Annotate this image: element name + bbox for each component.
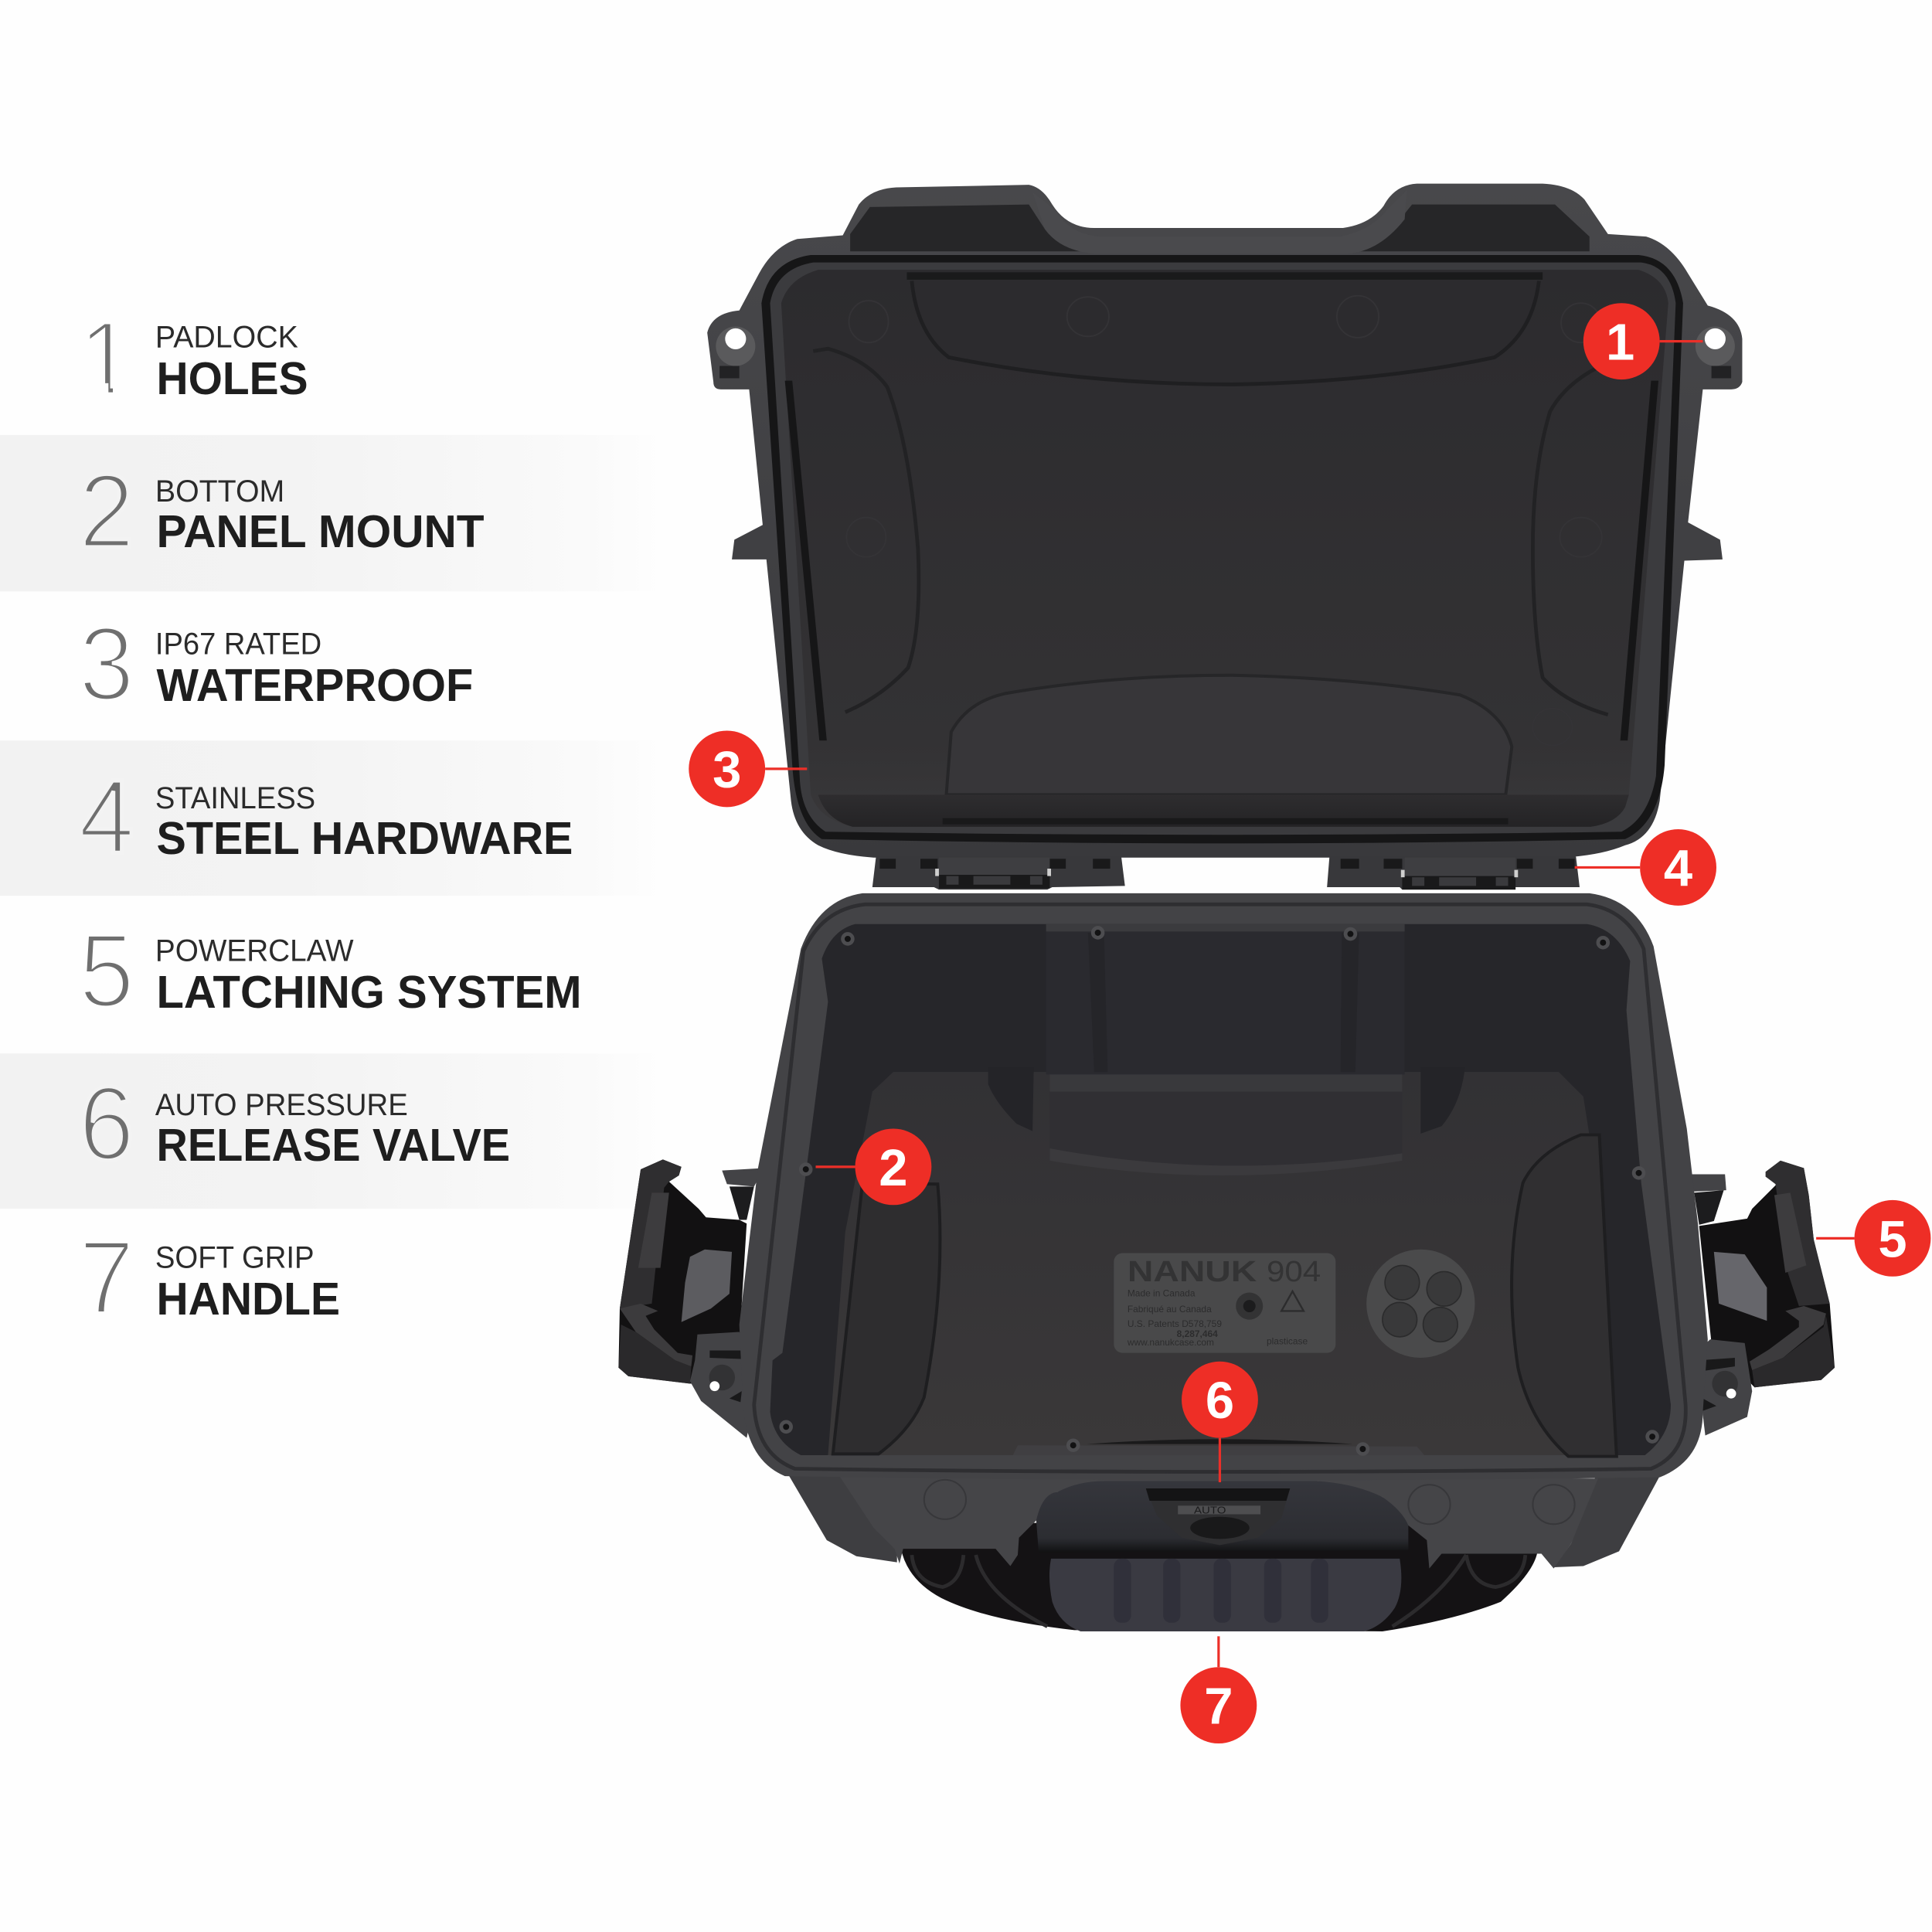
product plate: 904: [1267, 1255, 1321, 1288]
lid handle recess: [850, 205, 1590, 253]
feature 6: 6: [79, 1064, 134, 1182]
back wall ribs: [1088, 933, 1359, 1072]
callout 2: [815, 1128, 931, 1205]
latch bearing: [1714, 1252, 1767, 1321]
feature 4: STAINLESS: [155, 781, 315, 815]
callout 2: 2: [879, 1139, 908, 1197]
feature 3: [79, 605, 473, 723]
feature 1: [74, 299, 308, 417]
rim groove: [754, 904, 1685, 1471]
lid lower band: [818, 794, 1629, 827]
lid left groove: [785, 381, 827, 740]
feature 6: [79, 1064, 510, 1182]
row band 2: [0, 435, 665, 591]
lid right groove: [1621, 381, 1658, 740]
cavity: [770, 924, 1671, 1455]
left hinge: [872, 856, 1125, 889]
product plate: www.nanukcase.com: [1127, 1337, 1214, 1348]
rim: [740, 893, 1708, 1480]
feature 7: [79, 1219, 340, 1336]
latch wedge: [1752, 1316, 1835, 1387]
feature 4: [79, 757, 573, 875]
raised floor panel: [1049, 1092, 1402, 1171]
cavity floor: [828, 1072, 1614, 1455]
feature 7: 7: [79, 1219, 134, 1336]
callout 3: [689, 730, 807, 807]
lid bottom bar: [943, 818, 1509, 825]
product plate: Fabriqué au Canada: [1128, 1304, 1212, 1315]
notch left: [988, 1067, 1034, 1131]
notch right: [1420, 1067, 1465, 1134]
feature 5: [79, 912, 582, 1029]
feature 7: SOFT GRIP: [155, 1241, 315, 1275]
latch wedge: [618, 1325, 691, 1383]
feature 5: LATCHING SYSTEM: [156, 967, 582, 1018]
case base: [740, 893, 1708, 1569]
feature 1: HOLES: [156, 353, 308, 404]
feature 4: 4: [79, 757, 134, 875]
feature 2: PANEL MOUNT: [156, 506, 485, 557]
feature 5: POWERCLAW: [155, 934, 354, 968]
screws: [781, 928, 1657, 1454]
lid inner rim: [770, 263, 1675, 835]
floor right recess: [1512, 1134, 1617, 1457]
callout 1: 1: [1606, 314, 1634, 372]
callout 4: [1575, 829, 1716, 906]
padlock hole right: [1696, 327, 1735, 378]
feature 7: HANDLE: [156, 1274, 340, 1325]
lid: [707, 184, 1742, 858]
feature 3: IP67 RATED: [155, 628, 321, 662]
right latch: [1699, 1161, 1835, 1387]
callout 3: 3: [713, 741, 741, 799]
callout 6: 6: [1206, 1372, 1234, 1430]
product plate: Made in Canada: [1128, 1287, 1196, 1298]
hinges: [872, 856, 1580, 889]
raised floor lip: [1049, 1148, 1402, 1175]
front lip: [1013, 1445, 1424, 1455]
shelf bar: [1049, 1074, 1402, 1092]
handle: [900, 1523, 1538, 1631]
latch silhouette: [618, 1159, 747, 1383]
back wall lip: [1046, 924, 1405, 931]
padlock hole left: [716, 327, 755, 378]
grip ribs: [1114, 1559, 1328, 1623]
feature 2: [79, 452, 485, 570]
row band 6: [0, 1053, 665, 1209]
feature 5: 5: [79, 912, 134, 1029]
feature 1: PADLOCK: [155, 321, 298, 355]
latch slot: [1774, 1192, 1806, 1273]
callout 1: [1583, 303, 1702, 379]
callout 5: [1816, 1200, 1930, 1277]
auto pressure valve: AUTO: [1194, 1505, 1226, 1516]
front body panel: [838, 1474, 1598, 1569]
auto pressure valve: [1146, 1488, 1290, 1545]
lid bottom pocket: [946, 675, 1512, 794]
callout 7: [1180, 1636, 1257, 1743]
product plate: [1114, 1253, 1335, 1353]
callout 4: 4: [1664, 839, 1692, 897]
latch body: [620, 1159, 682, 1308]
row band 4: [0, 740, 665, 896]
feature 3: WATERPROOF: [156, 660, 473, 711]
moulded marks: [924, 1480, 1575, 1524]
lid outer shell: [707, 184, 1742, 858]
latch arm: [1750, 1306, 1826, 1370]
callout 5: 5: [1878, 1210, 1907, 1268]
callout 6: [1182, 1362, 1258, 1482]
case photo: open Nanuk case: [618, 184, 1835, 1631]
front body left side: [785, 1469, 897, 1563]
right hinge: [1327, 856, 1580, 889]
floor left recess: [833, 1183, 940, 1454]
latch arm: [620, 1304, 692, 1366]
soft grip: [1049, 1559, 1401, 1631]
feature 6: AUTO PRESSURE: [155, 1088, 408, 1122]
lid right recess: [1532, 367, 1608, 715]
feature 4: STEEL HARDWARE: [156, 813, 573, 864]
product plate: NANUK: [1128, 1255, 1257, 1288]
lid top bar: [906, 272, 1543, 280]
feature 3: 3: [79, 605, 134, 723]
hinge loops: [912, 1555, 1526, 1627]
feature 2: 2: [79, 452, 134, 570]
product plate: 8,287,464: [1177, 1328, 1218, 1339]
callout 7: 7: [1204, 1678, 1233, 1736]
back wall panel: [1046, 931, 1405, 1074]
lid left recess: [813, 349, 919, 713]
latch bearing: [682, 1250, 732, 1322]
lid gasket: [761, 255, 1683, 843]
panel: feature list: [0, 299, 665, 1336]
feature 1: 1: [79, 299, 133, 417]
lid inner panel: [781, 270, 1668, 827]
feature 2: BOTTOM: [155, 474, 284, 509]
product plate: U.S. Patents D578,759: [1128, 1318, 1222, 1329]
lid top pocket: [912, 281, 1539, 384]
handle bracket: [900, 1523, 1538, 1631]
product plate: plasticase: [1267, 1335, 1308, 1346]
front body right side: [1554, 1476, 1660, 1567]
latch slot: [638, 1192, 669, 1268]
left mount ear: [690, 1168, 764, 1438]
lid moulded dots: [846, 296, 1602, 746]
front handle arch: [1036, 1481, 1408, 1553]
feature 6: RELEASE VALVE: [156, 1120, 510, 1171]
date dials: [1366, 1250, 1475, 1358]
latch silhouette: [1699, 1161, 1835, 1387]
front lip line: [1087, 1439, 1353, 1444]
left latch: [618, 1159, 747, 1383]
right mount ear: [1685, 1174, 1752, 1435]
lid handle bridge: [1032, 190, 1407, 253]
latch body: [1766, 1161, 1830, 1306]
